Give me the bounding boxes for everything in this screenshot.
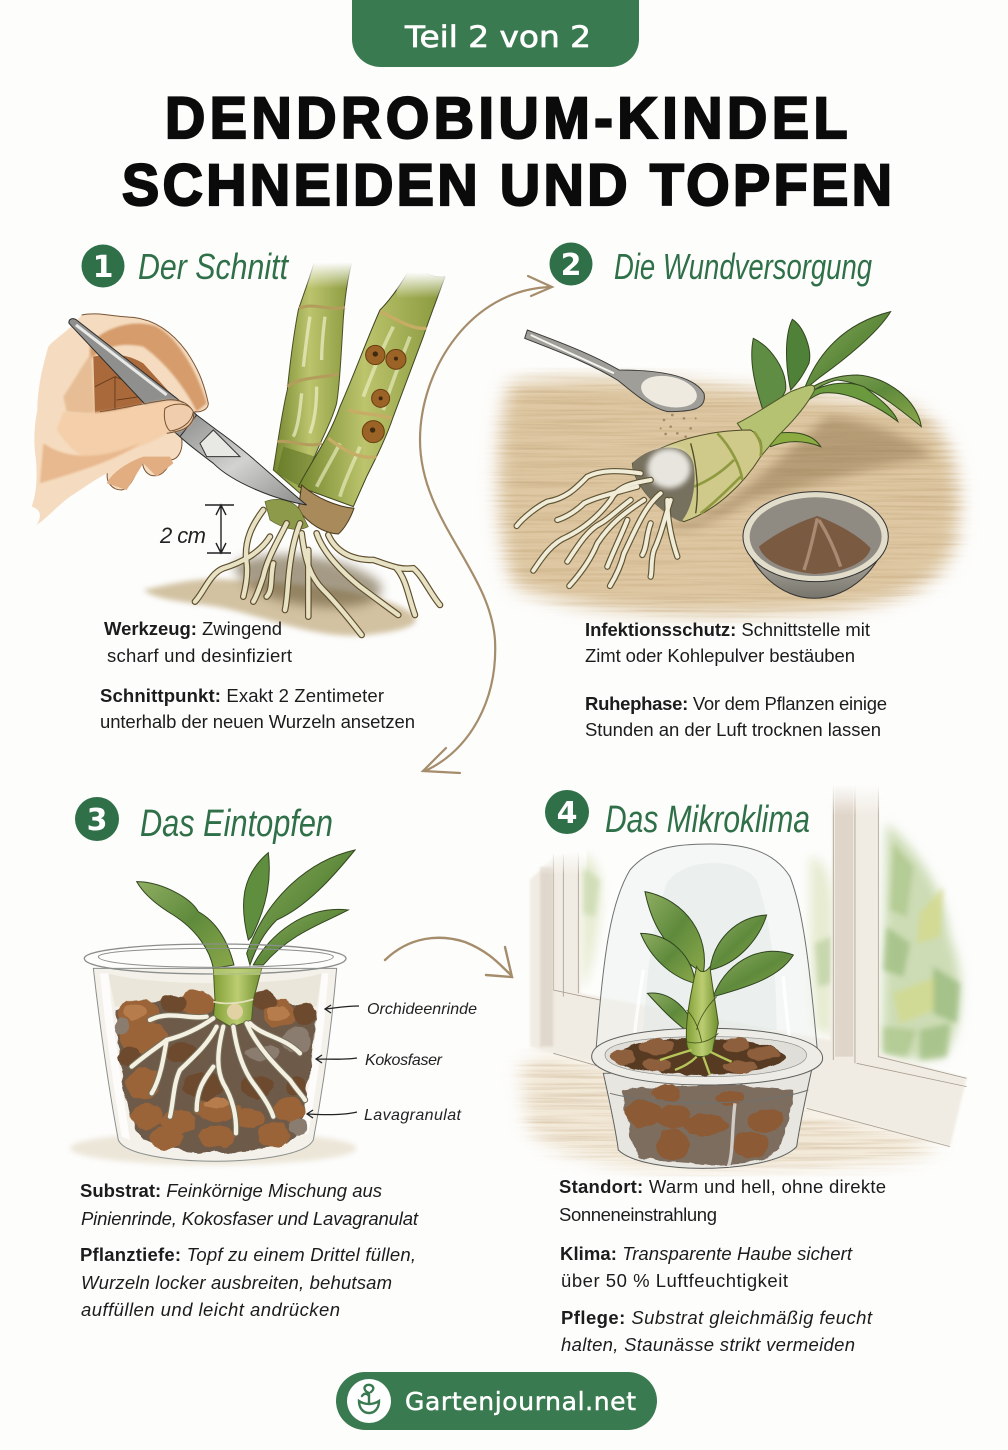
left stem xyxy=(273,253,353,493)
pot rim xyxy=(84,944,346,974)
wood tabletop xyxy=(499,380,958,614)
heading: step 3: Das Eintopfen xyxy=(140,803,333,845)
dimension label: 2 cm xyxy=(159,505,234,553)
table shadow xyxy=(664,417,934,528)
heading: step 1 xyxy=(82,244,290,288)
leaves xyxy=(137,850,355,968)
text: step 3 tips: Pinienrinde, Kokosfaser und Lavagranulat xyxy=(81,1208,419,1229)
title xyxy=(122,87,892,218)
text: step 3 tips: Pflanztiefe: Topf zu einem Drittel füllen, xyxy=(80,1244,416,1265)
leaves xyxy=(752,312,921,447)
plant leaves xyxy=(641,892,793,1037)
arrow: step 3 to step 4 xyxy=(385,938,512,977)
heading: step 4: 4 xyxy=(557,796,577,831)
spots on right stem xyxy=(362,345,406,443)
text: step 3 tips xyxy=(80,1180,419,1320)
text: step 4 tips xyxy=(559,1176,886,1355)
substrate xyxy=(114,989,317,1152)
roots xyxy=(517,471,677,586)
pot shadow xyxy=(70,1132,357,1165)
text: step 4 tips: halten, Staunässe strikt vermeiden xyxy=(561,1334,855,1355)
cutting body xyxy=(737,385,814,457)
thumb xyxy=(57,400,194,458)
text: step 1 tips: Werkzeug: Zwingend xyxy=(104,618,282,639)
powder falling xyxy=(660,414,697,438)
lower substrate xyxy=(623,1085,793,1164)
pot body xyxy=(93,968,337,1161)
substrate labels with pointers: Kokosfaser xyxy=(365,1052,443,1069)
text: step 1 tips xyxy=(100,618,415,732)
plant stem xyxy=(686,967,718,1057)
title: DENDROBIUM-KINDEL xyxy=(165,87,848,151)
heading: step 4: Das Mikroklima xyxy=(605,799,810,841)
badge: part indicator: Teil 2 von 2 xyxy=(404,20,591,54)
text: step 2 tips: Infektionsschutz: Schnittstelle mit xyxy=(585,619,870,640)
icon: sprout in a pot xyxy=(359,1385,379,1413)
pot rim with soil xyxy=(592,1028,823,1085)
text: step 4 tips: Standort: Warm und hell, ohne direkte xyxy=(559,1176,886,1197)
illustration: powdered cutting, spoon and bowl xyxy=(517,312,934,598)
scalpel xyxy=(69,319,307,505)
right stem xyxy=(298,263,445,507)
footer badge: Gartenjournal.net xyxy=(405,1387,636,1416)
foliage behind the window xyxy=(582,823,961,1060)
text: step 3 tips: Wurzeln locker ausbreiten, behutsam xyxy=(81,1272,392,1293)
top soil xyxy=(611,1038,785,1075)
text: step 1 tips: unterhalb der neuen Wurzeln ansetzen xyxy=(100,711,415,732)
illustration: hand cutting the keiki with a scalpel xyxy=(32,248,453,636)
text: step 3 tips: Substrat: Feinkörnige Mischung aus xyxy=(80,1180,382,1201)
roots xyxy=(132,1015,305,1133)
heading: step 3 xyxy=(75,797,333,845)
text: step 1 tips: Schnittpunkt: Exakt 2 Zentimeter xyxy=(100,685,384,706)
faded stem tips xyxy=(307,248,453,298)
pot body xyxy=(603,1070,812,1168)
heading: step 1: Der Schnitt xyxy=(138,246,290,287)
hand xyxy=(32,314,208,525)
text: step 2 tips xyxy=(585,619,887,740)
text: step 4 tips: Klima: Transparente Haube sichert xyxy=(560,1243,853,1264)
text: step 4 tips: Pflege: Substrat gleichmäßig feucht xyxy=(561,1307,873,1328)
arrow: step 1 to step 2 and step 3 xyxy=(420,276,552,773)
text: step 2 tips: Stunden an der Luft trocknen lassen xyxy=(585,719,881,740)
substrate labels with pointers: Orchideenrinde xyxy=(367,1001,477,1018)
bowl of cinnamon powder xyxy=(743,492,888,598)
text: step 2 tips: Zimt oder Kohlepulver bestäuben xyxy=(585,645,855,666)
heading: step 1: 1 xyxy=(93,250,113,285)
heading: step 2: 2 xyxy=(561,248,581,283)
heading: step 3: 3 xyxy=(87,803,107,838)
text: step 2 tips: Ruhephase: Vor dem Pflanzen einige xyxy=(585,693,887,714)
substrate labels with pointers xyxy=(307,1001,477,1124)
text: step 3 tips: auffüllen und leicht andrücken xyxy=(81,1299,340,1320)
window sill tabletop xyxy=(520,1054,940,1170)
badge: part indicator xyxy=(352,0,639,67)
heading: step 4 xyxy=(545,790,810,841)
heading: step 2 xyxy=(550,242,872,287)
stem xyxy=(213,968,262,1027)
footer badge xyxy=(336,1372,657,1430)
roots xyxy=(195,510,440,635)
collar at the stem base xyxy=(298,485,354,534)
text: step 4 tips: über 50 % Luftfeuchtigkeit xyxy=(561,1270,788,1291)
illustration: plant under dome on the windowsill xyxy=(530,768,967,1168)
heading: step 2: Die Wundversorgung xyxy=(614,246,872,287)
dome xyxy=(596,844,817,1050)
illustration: plant in transparent pot xyxy=(70,850,357,1165)
text: step 4 tips: Sonneneinstrahlung xyxy=(559,1204,717,1225)
text: step 1 tips: scharf und desinfiziert xyxy=(107,645,292,666)
spoon xyxy=(525,330,704,412)
title: SCHNEIDEN UND TOPFEN xyxy=(122,154,892,218)
dimension label: 2 cm: 2 cm xyxy=(159,523,206,548)
window frame xyxy=(530,768,967,1147)
soil under the roots xyxy=(143,579,416,636)
substrate labels with pointers: Lavagranulat xyxy=(364,1107,462,1124)
